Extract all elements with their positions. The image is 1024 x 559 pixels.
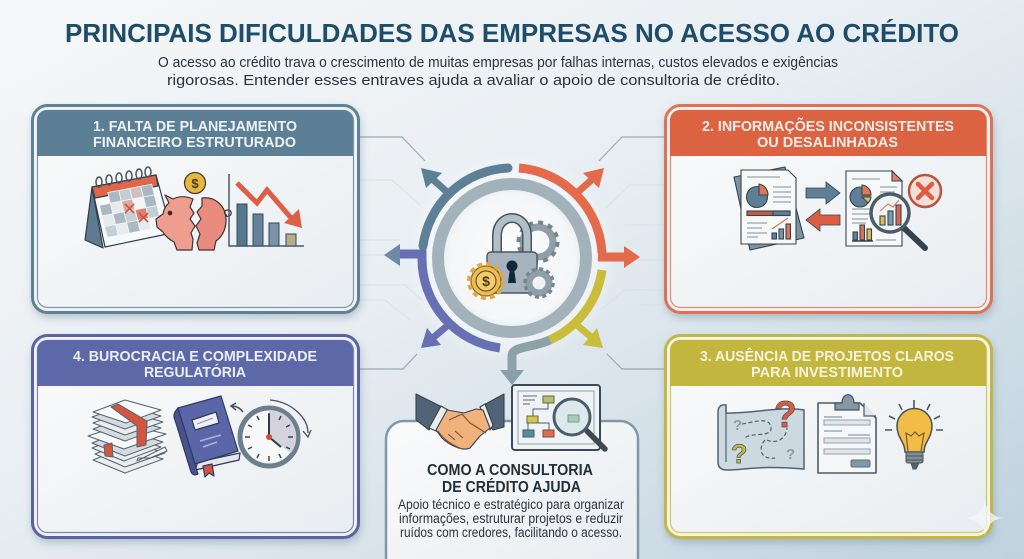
icon: flowchart with magnifier	[512, 385, 605, 450]
heading	[93, 118, 297, 151]
icon: clipboard form	[818, 395, 876, 473]
heading: REGULATÓRIA	[144, 363, 246, 381]
body text: ruídos com credores, facilitando o acesso.	[400, 525, 622, 540]
intro text: O acesso ao crédito trava o crescimento de muitas empresas por falhas internas, custos elevados e exigências	[158, 55, 838, 71]
heading: 3. AUSÊNCIA DE PROJETOS CLAROS	[700, 347, 954, 365]
halo	[406, 152, 618, 364]
title: PRINCIPAIS DIFICULDADES DAS EMPRESAS NO ACESSO AO CRÉDITO	[65, 18, 959, 48]
grey ring	[438, 184, 586, 332]
heading: PARA INVESTIMENTO	[751, 364, 903, 381]
heading: 4. BUROCRACIA E COMPLEXIDADE	[73, 348, 317, 365]
body text: Apoio técnico e estratégico para organizar	[398, 497, 624, 512]
icon: padlock with gears	[469, 218, 558, 298]
icon: sparkle	[966, 500, 1002, 536]
icon: uncertain map: ?	[733, 417, 742, 434]
icon: calendar	[85, 167, 172, 248]
icon: error mark	[909, 175, 941, 207]
intro text: rigorosas. Entender esses entraves ajuda a avaliar o apoio de consultoria de crédito.	[167, 73, 780, 89]
heading: FINANCEIRO ESTRUTURADO	[93, 134, 296, 151]
heading: DE CRÉDITO AJUDA	[442, 477, 581, 496]
icon: document stack	[734, 167, 804, 250]
icon: uncertain map: ?	[786, 446, 795, 463]
heading: COMO A CONSULTORIA	[427, 462, 593, 479]
icon: broken piggy bank	[156, 172, 231, 250]
icon: clock	[231, 400, 311, 466]
icon: uncertain map	[718, 394, 804, 470]
heading: 2. INFORMAÇÕES INCONSISTENTES	[702, 117, 954, 135]
heading: OU DESALINHADAS	[757, 134, 898, 151]
panel: 3 ausencia de projetos	[666, 336, 992, 538]
arrow: bottom	[500, 340, 550, 385]
icon: broken piggy bank: $	[191, 176, 199, 191]
panel: 1 falta de planejamento	[32, 106, 358, 312]
icon: handshake	[416, 394, 504, 449]
icon: uncertain map: ?	[731, 439, 748, 469]
icon: exchange arrows	[806, 182, 840, 231]
arrow: bottom right	[545, 270, 603, 348]
panel: 4 burocracia	[32, 336, 358, 538]
icon: light bulb	[885, 400, 943, 469]
icon: regulation book	[174, 396, 240, 477]
arrow: left and bottom left	[384, 244, 500, 348]
intro text	[158, 55, 838, 89]
heading: 1. FALTA DE PLANEJAMENTO	[93, 118, 297, 135]
heading	[427, 462, 593, 496]
central diagram	[384, 152, 640, 385]
arrow: top left	[421, 168, 508, 246]
heading	[73, 348, 317, 381]
body text	[398, 497, 624, 540]
body text: informações, estruturar projetos e reduzir	[399, 511, 623, 526]
icon: padlock with gears: $	[482, 273, 490, 289]
panel: como a consultoria ajuda	[386, 385, 638, 559]
icon: paper stack	[88, 400, 167, 473]
panel: 2 informacoes inconsistentes	[666, 106, 992, 312]
icon: uncertain map: ?	[774, 394, 797, 435]
icon: falling bar chart	[229, 174, 304, 246]
heading	[702, 117, 954, 151]
icon: reviewed document with magnifier	[846, 171, 925, 248]
arrow: top right	[519, 168, 640, 268]
heading	[700, 347, 954, 381]
connector lines	[359, 137, 664, 369]
